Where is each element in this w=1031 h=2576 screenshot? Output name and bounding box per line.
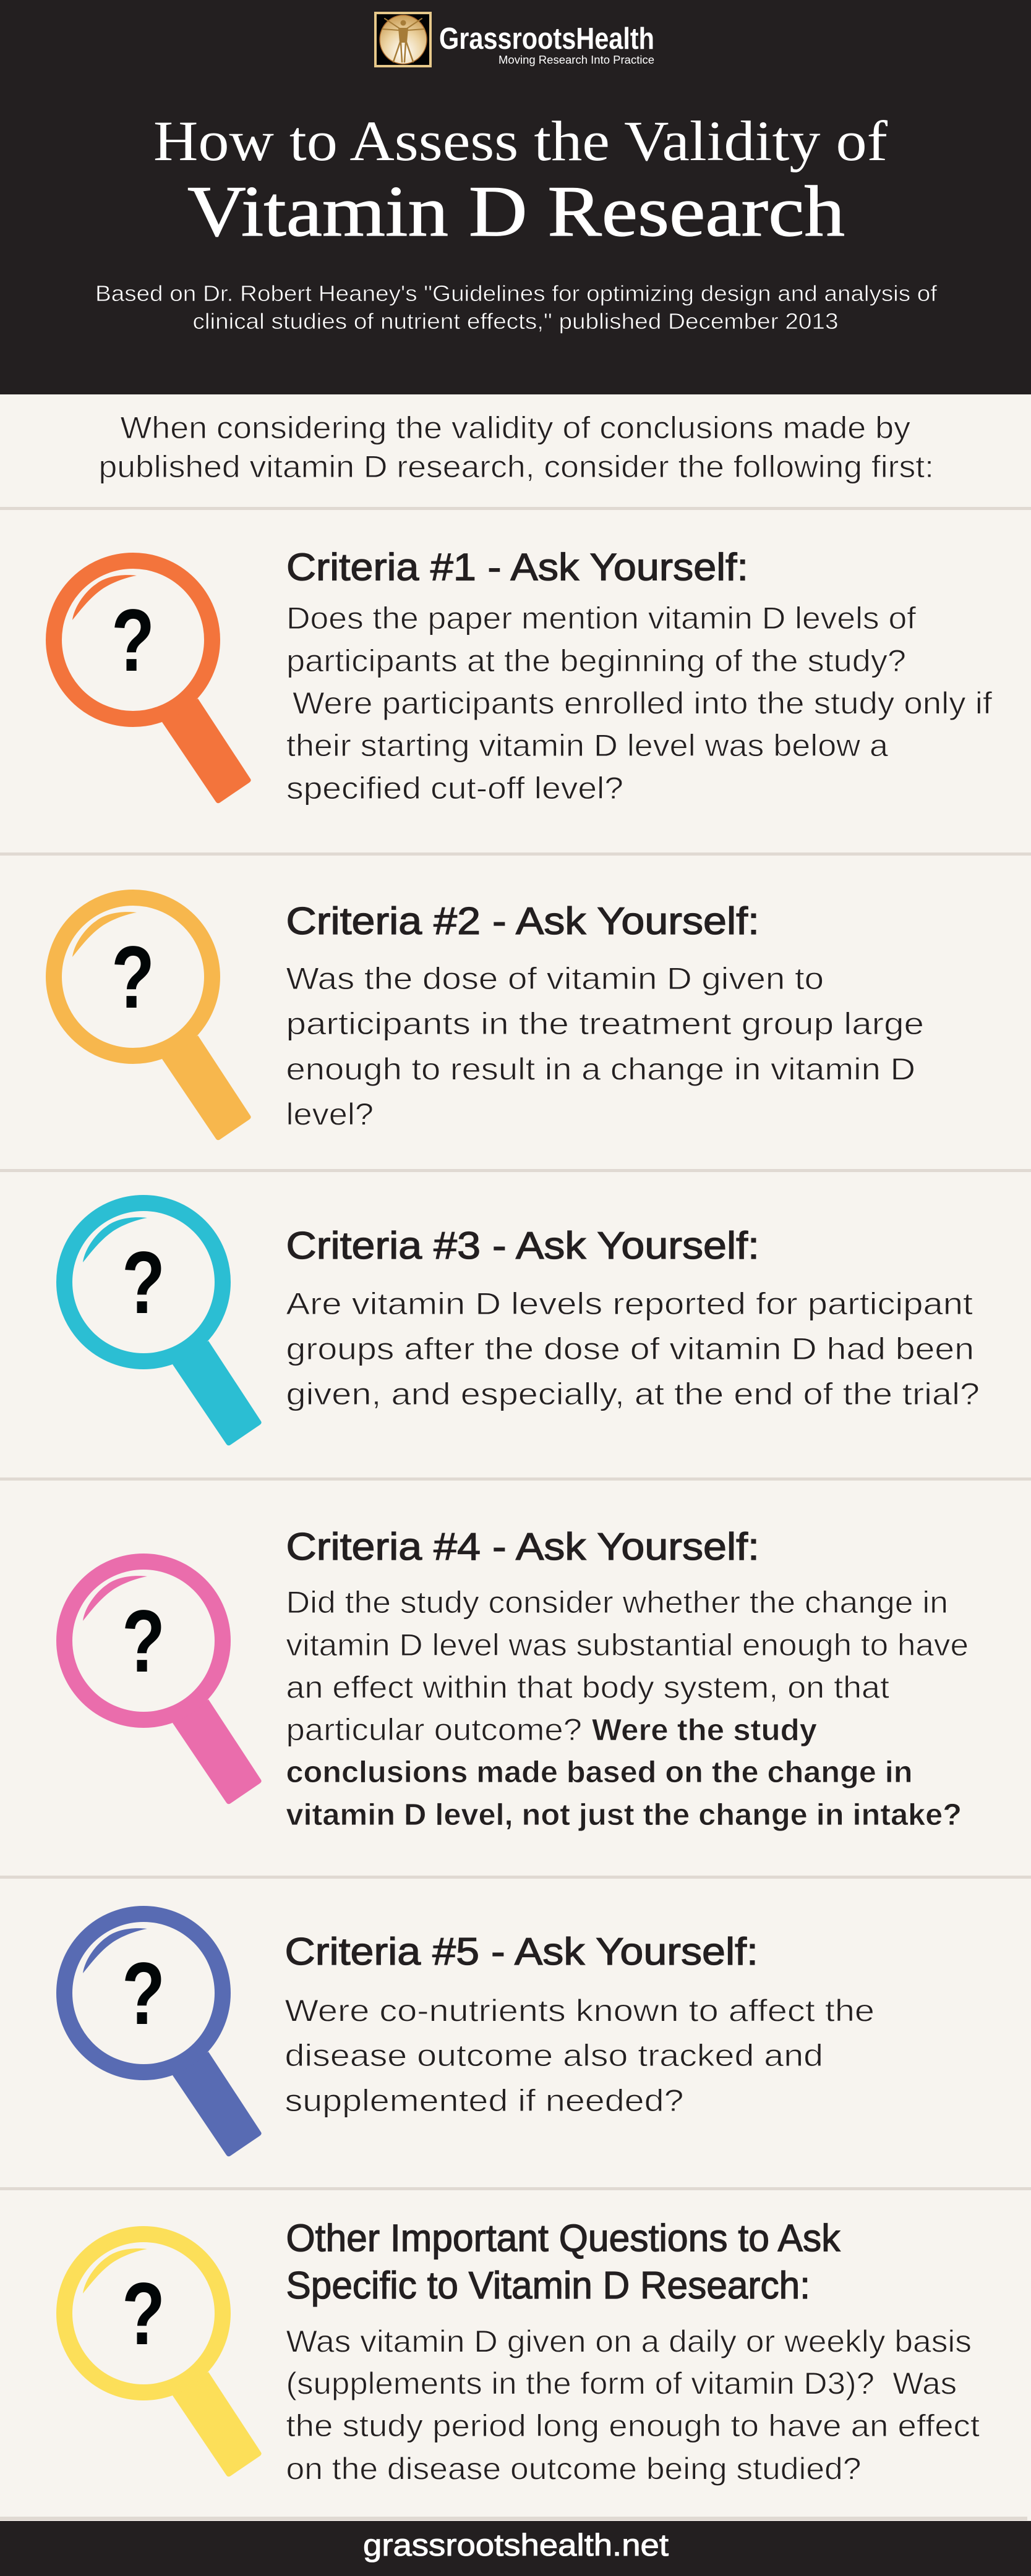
subtitle: Based on Dr. Robert Heaney's "Guidelines for optimizing design and analysis of xyxy=(95,281,938,306)
heading: other important questions: Specific to Vitamin D Research: xyxy=(286,2264,810,2307)
title xyxy=(153,109,888,252)
panel: other important questions xyxy=(64,2217,980,2486)
body text: criteria 2: Was the dose of vitamin D given to xyxy=(286,961,824,996)
title: How to Assess the Validity of xyxy=(153,109,888,172)
title: Vitamin D Research xyxy=(187,172,845,252)
body text: criteria 4: Were the study xyxy=(592,1714,817,1747)
body text: criteria 3: given, and especially, at the end of the trial? xyxy=(286,1377,980,1411)
icon: pink magnifying glass with question mark: ? xyxy=(122,1592,165,1691)
body text: criteria 4 xyxy=(286,1585,969,1832)
body text: other important questions xyxy=(286,2324,980,2486)
icon: amber magnifying glass with question mark xyxy=(54,898,251,1140)
subtitle xyxy=(95,281,938,334)
body text: criteria 3 xyxy=(286,1286,980,1411)
body text: criteria 5: supplemented if needed? xyxy=(284,2083,684,2118)
logo wordmark: GrassrootsHealth xyxy=(439,22,654,56)
body text: criteria 4: particular outcome? xyxy=(286,1712,582,1747)
heading: other important questions: Other Important Questions to Ask xyxy=(286,2217,841,2260)
body text: criteria 3: Are vitamin D levels reported for participant xyxy=(286,1286,973,1321)
heading: criteria 2: Criteria #2 - Ask Yourself: xyxy=(286,900,759,943)
footer bar xyxy=(0,2521,1031,2576)
body text: criteria 1 xyxy=(286,601,992,806)
body text: other important questions: (supplements in the form of vitamin D3)? Was xyxy=(286,2366,957,2401)
body text: criteria 1: Does the paper mention vitamin D levels of xyxy=(286,601,916,635)
body text: criteria 1: participants at the beginning of the study? xyxy=(286,644,906,678)
body text: criteria 1: their starting vitamin D level was below a xyxy=(286,728,888,763)
body text: criteria 4: an effect within that body system, on that xyxy=(286,1670,889,1705)
body text: other important questions: the study period long enough to have an effect xyxy=(286,2408,980,2443)
panel: criteria 3 xyxy=(64,1203,980,1445)
heading: criteria 1: Criteria #1 - Ask Yourself: xyxy=(286,546,748,589)
heading: other important questions xyxy=(286,2217,841,2307)
body text: criteria 1: Were participants enrolled into the study only if xyxy=(293,686,992,721)
icon: teal magnifying glass with question mark: ? xyxy=(122,1234,165,1332)
logo tagline: Moving Research Into Practice xyxy=(498,53,654,66)
icon: yellow magnifying glass with question mark xyxy=(64,2234,262,2476)
body text: criteria 4: vitamin D level, not just the change in intake? xyxy=(286,1798,962,1832)
body text: other important questions: Was vitamin D given on a daily or weekly basis xyxy=(286,2324,972,2359)
body text: other important questions: on the disease outcome being studied? xyxy=(286,2452,861,2486)
body text: criteria 1: specified cut-off level? xyxy=(286,771,623,806)
panel: criteria 1 xyxy=(54,546,992,806)
intro text xyxy=(99,410,934,484)
heading: criteria 4: Criteria #4 - Ask Yourself: xyxy=(286,1526,759,1568)
body text: criteria 3: groups after the dose of vitamin D had been xyxy=(286,1332,974,1366)
icon: orange magnifying glass with question mark xyxy=(54,561,251,803)
subtitle: clinical studies of nutrient effects," published December 2013 xyxy=(193,308,839,334)
icon: vitruvian figure emblem xyxy=(374,12,432,67)
body text: criteria 2: level? xyxy=(286,1097,374,1131)
heading: criteria 3: Criteria #3 - Ask Yourself: xyxy=(286,1225,759,1267)
icon: teal magnifying glass with question mark xyxy=(64,1203,262,1445)
header banner xyxy=(0,0,1031,394)
icon: yellow magnifying glass with question mark: ? xyxy=(122,2265,165,2363)
logo: GrassrootsHealth xyxy=(374,12,654,67)
panel: criteria 5 xyxy=(64,1914,875,2156)
body text: criteria 5: Were co-nutrients known to affect the xyxy=(284,1993,875,2028)
panel: criteria 4 xyxy=(64,1526,969,1832)
body text: criteria 4: Did the study consider whether the change in xyxy=(286,1585,948,1620)
heading: criteria 5: Criteria #5 - Ask Yourself: xyxy=(284,1931,758,1973)
panel: criteria 2 xyxy=(54,898,924,1140)
body text: criteria 2 xyxy=(286,961,924,1131)
intro text: When considering the validity of conclusions made by xyxy=(120,410,910,445)
body text: criteria 2: enough to result in a change in vitamin D xyxy=(286,1052,915,1087)
body text: criteria 5 xyxy=(284,1993,875,2118)
body text: criteria 4: conclusions made based on the change in xyxy=(286,1756,913,1789)
footer URL: grassrootshealth.net xyxy=(363,2528,669,2562)
body text: criteria 5: disease outcome also tracked and xyxy=(284,2038,823,2073)
body text: criteria 4: vitamin D level was substantial enough to have xyxy=(286,1628,969,1662)
icon: amber magnifying glass with question mark: ? xyxy=(111,929,155,1027)
icon: blue magnifying glass with question mark xyxy=(64,1914,262,2156)
intro text: published vitamin D research, consider the following first: xyxy=(99,449,934,484)
body text: criteria 2: participants in the treatment group large xyxy=(286,1006,924,1041)
icon: blue magnifying glass with question mark: ? xyxy=(122,1945,165,2043)
icon: pink magnifying glass with question mark xyxy=(64,1562,262,1804)
icon: orange magnifying glass with question mark: ? xyxy=(111,592,155,690)
